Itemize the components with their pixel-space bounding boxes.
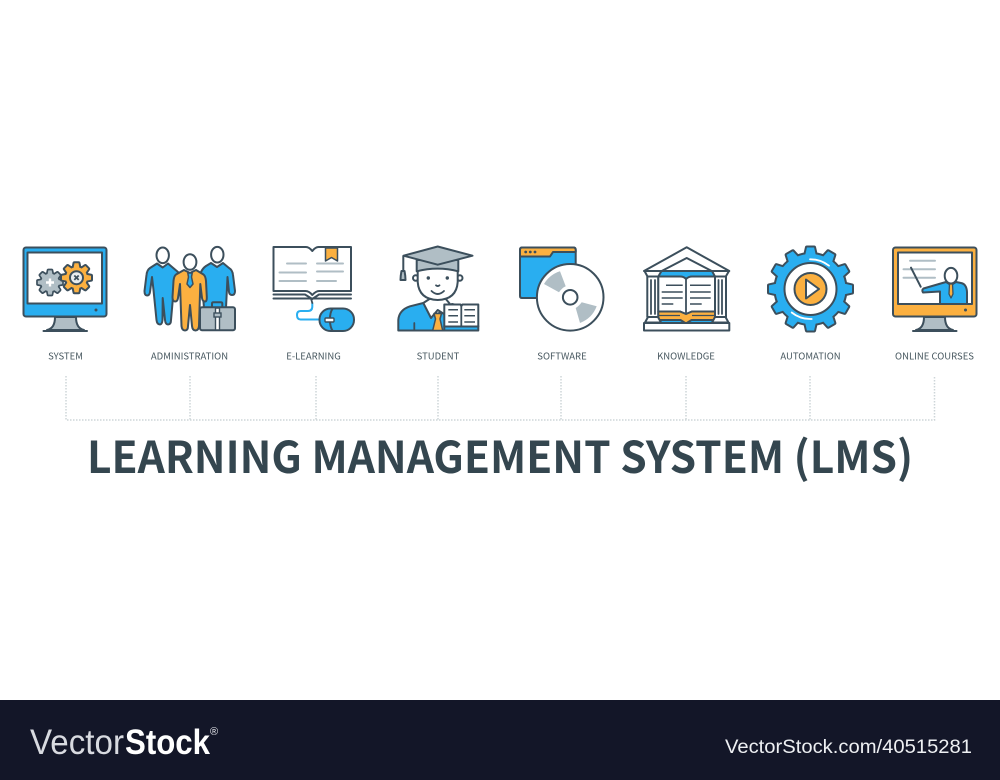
dotted connector lines <box>66 376 934 420</box>
title: LEARNING MANAGEMENT SYSTEM (LMS) <box>87 422 913 486</box>
label: student: STUDENT <box>417 348 460 362</box>
icon: knowledge temple with open book <box>644 247 729 330</box>
icon: system monitor with gears <box>24 248 106 331</box>
label: administration: ADMINISTRATION <box>151 348 228 362</box>
icon: e-learning book and mouse <box>274 247 354 331</box>
label: automation: AUTOMATION <box>780 348 841 362</box>
footer logo: Stock <box>125 723 210 762</box>
label: software: SOFTWARE <box>537 348 587 362</box>
label: knowledge: KNOWLEDGE <box>657 348 715 362</box>
label: system: SYSTEM <box>48 348 83 362</box>
footer logo <box>30 723 218 762</box>
icon: student with graduation cap and book <box>398 246 478 330</box>
icon: automation gear with play button <box>769 248 852 330</box>
icon: software window and disc <box>520 248 604 331</box>
label: online courses: ONLINE COURSES <box>895 348 974 362</box>
footer image id: VectorStock.com/40515281 <box>725 737 972 758</box>
icon: administration team with briefcase <box>144 247 235 330</box>
footer bar <box>0 700 1000 780</box>
label: e-learning: E-LEARNING <box>286 348 341 362</box>
footer logo: Vector <box>30 723 124 762</box>
footer logo: ® <box>210 726 218 738</box>
icon: online courses monitor with presenter <box>893 248 976 331</box>
